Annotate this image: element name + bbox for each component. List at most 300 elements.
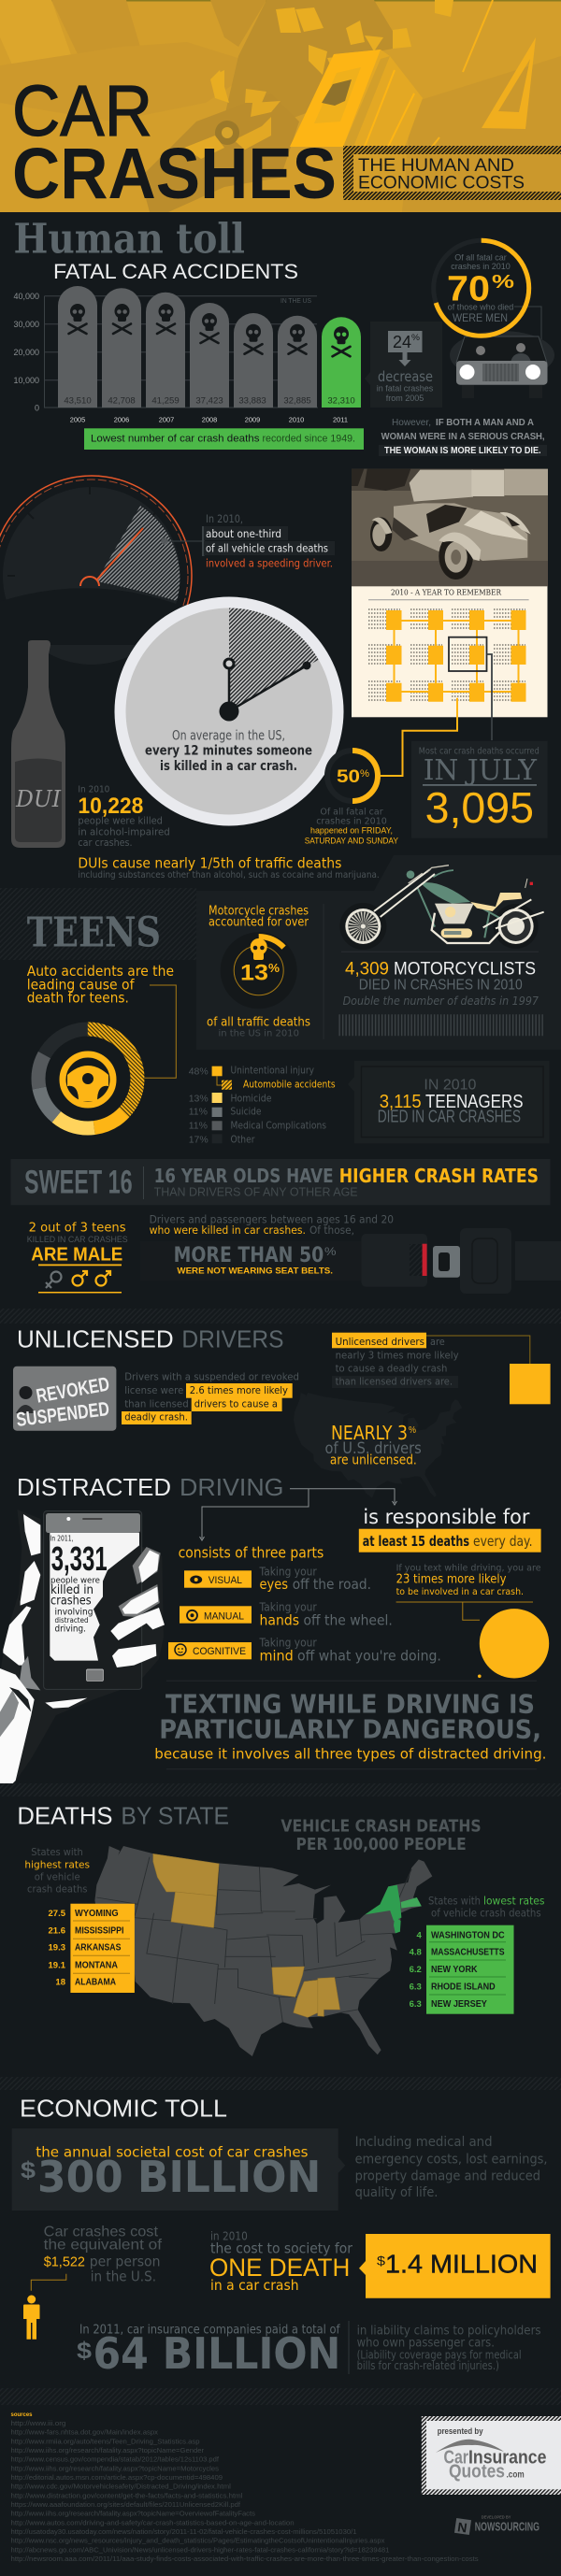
legend: causes of teen death: Other xyxy=(230,1134,255,1145)
banner: sweet 16: SWEET 16 xyxy=(24,1165,133,1201)
panel: 300 billion: $ xyxy=(21,2157,36,2183)
text: speeding driver: involved a speeding driver. xyxy=(206,557,333,570)
sources list: http://www.iii.org xyxy=(11,2419,65,2427)
legend: causes of teen death: Automobile accidents xyxy=(243,1079,336,1090)
map: USA by state xyxy=(94,1846,432,2056)
stat: 2 out of 3 are male xyxy=(27,1220,128,1294)
bar 2010: 32,885 xyxy=(283,396,311,407)
illustration: speedometer xyxy=(0,476,202,676)
panel: 300 billion xyxy=(12,2128,345,2211)
stat: 10,228 alcohol-impaired deaths: In 2010 xyxy=(78,784,109,794)
bar 2007: 2007 xyxy=(159,415,174,423)
bar 2010 xyxy=(278,316,317,423)
logo: NowSourcing: N xyxy=(456,2519,468,2536)
stat: nearly 3 percent unlicensed: are unlicensed. xyxy=(330,1453,417,1468)
text: woman more likely to die: THE WOMAN IS MORE LIKELY TO DIE. xyxy=(384,445,541,456)
text: speeding driver xyxy=(202,512,335,570)
sources list: http://www.autos.com/driving-and-safety/car-crash-statistics-based-on-age-and-location xyxy=(11,2518,295,2526)
bar 2008: 37,423 xyxy=(195,396,223,407)
text: unlicensed drivers 3 times: than licensed drivers are. xyxy=(336,1376,453,1387)
heading: fatal car accidents: FATAL CAR ACCIDENTS xyxy=(53,260,298,283)
bar chart: fatal car accidents by year: 20,000 xyxy=(13,348,39,357)
logo: NowSourcing: DEVELOPED BY xyxy=(482,2514,511,2519)
bar chart: fatal car accidents by year: IN THE US xyxy=(280,298,311,305)
table: highest rates: ALABAMA xyxy=(75,1978,116,1988)
text: DUI share of traffic deaths: including substances other than alcohol, such as cocaine and marijuana. xyxy=(78,870,380,880)
text: including medical costs xyxy=(355,2135,548,2200)
callout: texting while driving: because it involves all three types of distracted driving. xyxy=(154,1746,546,1763)
stat panel: 24 percent decrease: decrease xyxy=(378,368,433,385)
table: highest rates: 18 xyxy=(55,1978,65,1988)
panel: motorcycles xyxy=(196,855,561,1050)
stat: more than 50 percent no seat belts: WERE NOT WEARING SEAT BELTS. xyxy=(177,1267,333,1277)
legend: causes of teen death: 48% xyxy=(189,1066,209,1077)
item: cognitive distraction: COGNITIVE xyxy=(193,1646,246,1657)
warning triangle xyxy=(482,37,536,129)
icon: person xyxy=(23,2296,39,2340)
table: highest rates: ARKANSAS xyxy=(75,1943,122,1953)
heading: consists of three parts: consists of three parts xyxy=(179,1544,324,1562)
stat: 13 percent of traffic deaths xyxy=(207,904,310,1038)
text: leading cause of death: Auto accidents are the xyxy=(27,963,174,980)
heading: deaths by state: DEATHS xyxy=(17,1802,112,1830)
stat: nearly 3 percent unlicensed xyxy=(325,1422,422,1468)
stat: more than 50 percent no seat belts xyxy=(174,1244,337,1277)
text: drivers and passengers 16 to 20 xyxy=(150,1212,394,1237)
stat: 1,522 per person xyxy=(23,2225,163,2340)
text: leading cause of death: leading cause of xyxy=(27,976,135,993)
item: cognitive distraction: off what you're doing. xyxy=(297,1648,441,1665)
panel: 3,115 teenagers: DIED IN CAR CRASHES xyxy=(378,1108,521,1126)
heading: vehicle crash deaths per 100,000 xyxy=(280,1816,482,1854)
subtitle with hatched frame xyxy=(343,146,561,200)
banner: sweet 16: 16 YEAR OLDS HAVE xyxy=(154,1165,334,1187)
text: suspended license with highlights: 2.6 times more likely xyxy=(190,1385,288,1396)
stat: 15 deaths every day: at least 15 deaths xyxy=(363,1533,469,1550)
stat: 13 percent of traffic deaths: 13 xyxy=(240,960,268,985)
text: drivers and passengers 16 to 20: who were killed in car crashes. xyxy=(150,1224,306,1237)
panel: 300 billion: 300 BILLION xyxy=(37,2152,321,2202)
table: lowest rates: 4 xyxy=(417,1930,423,1940)
stat: 4,309 motorcyclists: DIED IN CRASHES IN 2010 xyxy=(359,977,523,993)
text: suspended license with highlights: Drivers with a suspended or revoked xyxy=(124,1372,299,1383)
stat: 23 times more likely xyxy=(396,1564,549,1679)
panel: most deaths in July: 3,095 xyxy=(425,783,534,832)
stat: 23 times more likely: 23 times more likely xyxy=(396,1572,507,1586)
text on phone screen: 3,331 killed: crashes xyxy=(50,1595,92,1609)
stat: 13 percent of traffic deaths: % xyxy=(268,961,280,975)
bar chart: fatal car accidents by year: 30,000 xyxy=(13,320,39,329)
illustration: clock xyxy=(114,596,344,826)
stat: 2 out of 3 are male: ARE MALE xyxy=(31,1244,122,1265)
section hatch band xyxy=(0,2077,561,2090)
24 percent box: % xyxy=(411,333,420,342)
table: lowest rates: 6.2 xyxy=(410,1965,422,1975)
stat: 50 percent on weekends xyxy=(305,751,399,846)
month day grids xyxy=(368,609,525,700)
connector: weekend to 50 percent xyxy=(379,698,457,776)
caption: lowest rates: States with xyxy=(428,1895,481,1908)
subtitle with hatched frame: THE HUMAN AND xyxy=(358,156,514,176)
connector: distracted driving branches xyxy=(200,1489,396,1540)
text: suspended license with highlights: license were xyxy=(124,1385,183,1396)
text: unlicensed drivers 3 times: nearly 3 times more likely xyxy=(336,1350,459,1361)
banner: sweet 16: THAN DRIVERS OF ANY OTHER AGE xyxy=(154,1184,358,1198)
stat: one death in a car crash: ONE DEATH xyxy=(209,2254,350,2282)
bar chart: fatal car accidents by year: 10,000 xyxy=(13,376,39,385)
text: including medical costs: emergency costs, lost earnings, xyxy=(355,2152,548,2167)
stat: 23 times more likely: If you text while driving, you are xyxy=(396,1564,541,1574)
illustration: motorcycle xyxy=(339,866,544,950)
stat: 64 billion: 64 BILLION xyxy=(94,2328,340,2379)
stat: 23 times more likely: to be involved in a car crash. xyxy=(396,1587,524,1597)
text: liability claims xyxy=(357,2325,541,2372)
heading: distracted driving xyxy=(17,1473,284,1501)
caption: highest rates xyxy=(24,1846,90,1895)
text on phone screen: 3,331 killed: 3,331 xyxy=(51,1539,108,1578)
stat: one death in a car crash: in a car crash xyxy=(210,2277,299,2294)
stat: 70 percent were men ring: % xyxy=(492,272,514,293)
illustration: DUI bottle xyxy=(11,640,65,848)
bar 2006: 2006 xyxy=(114,415,129,423)
text: drivers and passengers 16 to 20: Drivers and passengers between ages 16 and 20 xyxy=(150,1212,394,1225)
stat: 70 percent were men ring: of those who died xyxy=(448,303,513,312)
sources list: http://www.nsc.org/news_resources/injury_and_death_statistics/Pages/EstimatingtheCostsofUnintentionalInjuries.aspx xyxy=(11,2537,385,2545)
table: lowest rates: 6.3 xyxy=(410,1982,422,1992)
item: manual distraction: MANUAL xyxy=(204,1610,244,1622)
sources list: https://www.aaafoundation.org/sites/default/files/2011Unlicensed2Kill.pdf xyxy=(11,2500,241,2509)
sources list: http://abcnews.go.com/ABC_Univision/News/unlicensed-drivers-higher-rates-fatal-crashes-california/story?id=18239481 xyxy=(11,2545,389,2554)
callout: texting while driving xyxy=(154,1681,546,1769)
illustration: clock: On average in the US, xyxy=(172,729,285,744)
caption: lowest rates: of vehicle crash deaths xyxy=(431,1907,541,1920)
text: woman more likely to die: WOMAN WERE IN A SERIOUS CRASH, xyxy=(381,431,545,442)
stat: 50 percent on weekends: % xyxy=(360,768,369,780)
stat: 4,309 motorcyclists xyxy=(338,959,544,1025)
text: including medical costs: quality of life. xyxy=(355,2185,438,2200)
icon: down arrow xyxy=(398,352,411,366)
subtitle with hatched frame: ECONOMIC COSTS xyxy=(358,174,525,193)
item: cognitive distraction xyxy=(168,1637,441,1665)
text on phone screen: 3,331 killed xyxy=(50,1534,108,1635)
item: cognitive distraction: Taking your xyxy=(259,1637,317,1650)
stat: 10,228 alcohol-impaired deaths xyxy=(78,784,170,849)
bar 2006 xyxy=(102,288,141,423)
legend: causes of teen death: Suicide xyxy=(230,1107,262,1118)
bar 2005: 2005 xyxy=(70,415,85,423)
text: suspended license with highlights: than licensed xyxy=(124,1398,189,1410)
stat: 70 percent were men ring: crashes in 2010 xyxy=(451,262,511,271)
stat: 15 deaths every day: is responsible for xyxy=(363,1506,530,1528)
bar 2010: 2010 xyxy=(289,415,304,423)
heading: distracted driving: DRIVING xyxy=(180,1473,284,1501)
stat: more than 50 percent no seat belts: MORE THAN 50 xyxy=(174,1244,324,1267)
bar 2005: 43,510 xyxy=(64,396,92,407)
table: lowest rates: 6.3 xyxy=(410,1999,422,2010)
stat: 13 percent of traffic deaths: of all traffic deaths xyxy=(207,1015,310,1029)
text on phone screen: 3,331 killed: killed in xyxy=(50,1583,94,1597)
section hatch band xyxy=(0,1783,561,1796)
sources list: http://www.iihs.org/research/fatality.aspx?topicName=Gender xyxy=(11,2446,205,2454)
sources list: http://www.cdc.gov/Motorvehiclesafety/Distracted_Driving/index.html xyxy=(11,2483,231,2491)
header photo banner xyxy=(0,0,561,212)
text: unlicensed drivers 3 times: Unlicensed drivers xyxy=(336,1337,424,1348)
stat: 13 percent of traffic deaths: in the US in 2010 xyxy=(218,1028,299,1038)
legend: causes of teen death: Medical Complications xyxy=(230,1121,326,1132)
sources list: http://www.distraction.gov/content/get-the-facts/facts-and-statistics.html xyxy=(11,2491,243,2499)
stat: 1,522 per person: in the U.S. xyxy=(91,2268,156,2285)
text: DUI share of traffic deaths xyxy=(78,854,380,880)
stat: 70 percent were men ring: 70 xyxy=(447,270,490,309)
stat: 70 percent were men ring: WERE MEN xyxy=(453,311,508,324)
bar chart: fatal car accidents by year: 0 xyxy=(35,404,39,413)
illustration: revoked license card xyxy=(13,1367,116,1431)
text on phone screen: 3,331 killed: people were xyxy=(50,1576,100,1585)
text: woman more likely to die: However, xyxy=(392,417,431,428)
item: visual distraction: off the road. xyxy=(293,1576,371,1593)
stat: one death in a car crash: in 2010 xyxy=(210,2229,248,2243)
item: visual distraction: VISUAL xyxy=(209,1575,242,1586)
text on phone screen: 3,331 killed: distracted xyxy=(54,1616,88,1624)
text: suspended license with highlights: drivers to cause a xyxy=(194,1398,278,1410)
text: unlicensed drivers 3 times: to cause a deadly crash xyxy=(336,1363,447,1374)
callout: lowest number of deaths xyxy=(84,428,364,450)
bar chart: fatal car accidents by year xyxy=(13,286,361,423)
stat: 10,228 alcohol-impaired deaths: people were killed xyxy=(78,815,163,827)
stat: 10,228 alcohol-impaired deaths: car crashes. xyxy=(78,837,133,849)
bar 2008 xyxy=(190,303,229,423)
stat: 50 percent on weekends: Of all fatal car xyxy=(320,808,383,818)
bar 2006: 42,708 xyxy=(108,396,136,407)
bar 2009: 33,883 xyxy=(238,396,266,407)
illustration: car with two passengers xyxy=(450,307,554,398)
table: highest rates: 21.6 xyxy=(49,1925,65,1936)
table: highest rates: WYOMING xyxy=(75,1909,119,1919)
stat: 4,309 motorcyclists: Double the number of deaths in 1997 xyxy=(343,994,539,1008)
donut chart: causes of teen death xyxy=(38,1029,137,1128)
heading: distracted driving: DISTRACTED xyxy=(17,1473,171,1501)
24 percent box: 24 xyxy=(393,333,411,351)
text: leading cause of death: death for teens. xyxy=(27,989,129,1006)
stat: 4,309 motorcyclists: 4,309 xyxy=(345,959,389,979)
weekend highlight connectors xyxy=(395,621,518,692)
stat: 50 percent on weekends: 50 xyxy=(337,767,360,787)
text: suspended license with highlights: deadly crash. xyxy=(124,1411,188,1423)
table: highest rates: 19.1 xyxy=(49,1960,66,1970)
connector: text to donut xyxy=(145,985,176,1078)
sources list: http://newsroom.aaa.com/2011/11/aaa-study-finds-costs-associated-with-traffic-crashes-are-more-than-three-times-greater-than-congestion-costs xyxy=(11,2555,479,2563)
text on phone screen: 3,331 killed: In 2011, xyxy=(50,1534,74,1542)
banner: sweet 16 xyxy=(11,1159,550,1205)
item: manual distraction xyxy=(180,1600,393,1628)
heading: unlicensed drivers: UNLICENSED xyxy=(17,1325,174,1353)
24 percent box xyxy=(388,331,423,352)
illustration: clock: is killed in a car crash. xyxy=(160,759,297,774)
callout: 1.4 million xyxy=(359,2234,551,2298)
text: liability claims: bills for crash-related injuries.) xyxy=(357,2359,499,2372)
bar 2008: 2008 xyxy=(202,415,217,423)
stat: 50 percent on weekends: SATURDAY AND SUNDAY xyxy=(305,836,399,846)
table: highest rates: 27.5 xyxy=(49,1909,66,1919)
sources list: http://www.iihs.org/research/fatality.aspx?topicName=OverviewofFatalityFacts xyxy=(11,2510,255,2518)
stat: 64 billion: $ xyxy=(77,2338,92,2364)
stat: 15 deaths every day: every day. xyxy=(473,1533,533,1550)
caption: highest rates: States with xyxy=(31,1846,83,1858)
logo box: presented by CarInsuranceQuotes.com: Quotes xyxy=(449,2462,505,2483)
heading: vehicle crash deaths per 100,000: PER 100,000 PEOPLE xyxy=(295,1835,467,1854)
stat panel: 24 percent decrease: from 2005 xyxy=(386,394,424,403)
text: unlicensed drivers 3 times xyxy=(332,1333,551,1404)
item: manual distraction: Taking your xyxy=(259,1600,317,1613)
stat: more than 50 percent no seat belts: % xyxy=(324,1245,337,1258)
stat: 1,522 per person: Car crashes cost xyxy=(44,2225,159,2240)
item: manual distraction: off the wheel. xyxy=(303,1611,393,1628)
table: highest rates: MISSISSIPPI xyxy=(75,1925,124,1936)
legend: causes of teen death: Homicide xyxy=(230,1093,271,1104)
stat: 4,309 motorcyclists: MOTORCYCLISTS xyxy=(394,959,536,979)
logo box: presented by CarInsuranceQuotes.com: Car xyxy=(443,2448,468,2469)
icon: thought face xyxy=(175,1644,186,1655)
panel: 3,115 teenagers: IN 2010 xyxy=(424,1078,477,1094)
table: lowest rates xyxy=(410,1925,514,2014)
photo: vintage car xyxy=(352,469,548,586)
heading: vehicle crash deaths per 100,000: VEHICLE CRASH DEATHS xyxy=(280,1816,482,1836)
text on phone screen: 3,331 killed: involving xyxy=(54,1607,94,1617)
text: liability claims: (Liability coverage pays for medical xyxy=(357,2348,522,2361)
table: lowest rates: NEW YORK xyxy=(431,1965,478,1975)
legend: causes of teen death: 11% xyxy=(189,1107,208,1118)
callout: 1.4 million: $ xyxy=(377,2253,385,2268)
text: drivers and passengers 16 to 20: Of those, xyxy=(309,1224,354,1237)
connector: July to panel xyxy=(486,654,492,740)
item: visual distraction xyxy=(184,1566,371,1593)
stat: 50 percent on weekends: crashes in 2010 xyxy=(316,817,387,827)
callout: texting while driving: TEXTING WHILE DRIVING IS xyxy=(165,1689,535,1720)
panel: 300 billion: the annual societal cost of car crashes xyxy=(36,2143,309,2160)
item: visual distraction: eyes xyxy=(260,1576,288,1593)
illustration: DUI bottle: DUI xyxy=(15,786,62,812)
caption: highest rates: highest rates xyxy=(24,1858,90,1870)
bar 2009: 2009 xyxy=(245,415,260,423)
sources list: http://www.census.gov/compendia/statab/2012/tables/12s1103.pdf xyxy=(11,2455,220,2464)
icon: steering wheel xyxy=(63,1054,113,1105)
text on phone screen: 3,331 killed: driving. xyxy=(54,1624,86,1635)
table: lowest rates: MASSACHUSETTS xyxy=(431,1948,505,1958)
icon: gender symbols xyxy=(46,1271,110,1288)
title: car crashes: CAR xyxy=(12,71,152,151)
bar chart: fatal car accidents by year: 40,000 xyxy=(13,292,39,301)
heading: deaths by state: BY STATE xyxy=(121,1802,229,1830)
illustration: seat belt xyxy=(140,1228,561,1294)
bar 2011 highlighted xyxy=(322,317,361,423)
heading: unlicensed drivers: DRIVERS xyxy=(181,1325,284,1353)
caption: lowest rates: lowest rates xyxy=(483,1895,545,1908)
stat: 13 percent of traffic deaths: Motorcycle crashes xyxy=(209,904,309,918)
legend: causes of teen death: 11% xyxy=(189,1121,208,1132)
panel: 3,115 teenagers: 3,115 xyxy=(380,1092,422,1112)
table: lowest rates: 4.8 xyxy=(410,1948,422,1958)
text: speeding driver: of all vehicle crash deaths xyxy=(206,542,328,555)
heading: teens: TEENS xyxy=(27,909,161,957)
text: liability claims: who own passenger cars. xyxy=(357,2337,495,2351)
July highlight box xyxy=(449,637,486,671)
stat: one death in a car crash xyxy=(209,2229,353,2294)
text: DUI share of traffic deaths: DUIs cause nearly 1/5th of traffic deaths xyxy=(78,854,342,871)
illustration: revoked license card: SUSPENDED xyxy=(15,1398,110,1431)
bar 2011 highlighted: 2011 xyxy=(333,415,348,423)
stat: 1,522 per person: per person xyxy=(90,2253,161,2269)
highlighted states: highest rates xyxy=(153,1853,340,2017)
bar 2007: 41,259 xyxy=(151,396,180,407)
panel: most deaths in July xyxy=(411,741,548,838)
stat: 10,228 alcohol-impaired deaths: 10,228 xyxy=(78,794,143,819)
table: highest rates: 19.3 xyxy=(49,1943,65,1953)
logo box: presented by CarInsuranceQuotes.com: presented by xyxy=(438,2426,483,2436)
map: faint US backdrop xyxy=(294,1393,462,1498)
icon: wheel xyxy=(187,1610,197,1621)
title: car crashes xyxy=(12,71,337,214)
section hatch band xyxy=(0,2388,561,2405)
logo box: presented by CarInsuranceQuotes.com: Insurance xyxy=(468,2448,546,2469)
stat: 1,522 per person: the equivalent of xyxy=(44,2238,163,2254)
legend: causes of teen death: 17% xyxy=(189,1134,209,1145)
stat: 64 billion: In 2011, car insurance companies paid a total of xyxy=(79,2324,340,2338)
table: lowest rates: WASHINGTON DC xyxy=(431,1930,505,1940)
calendar: 2010 a year to remember: 2010 - A YEAR TO REMEMBER xyxy=(391,589,502,598)
ambulance xyxy=(290,50,423,147)
caption: lowest rates xyxy=(428,1895,545,1920)
sources list: http://www-fars.nhtsa.dot.gov/Main/index.aspx xyxy=(11,2428,158,2437)
callout: lowest number of deaths: recorded since 1949. xyxy=(262,434,355,445)
heading: human toll: Human toll xyxy=(13,216,245,264)
stat: 50 percent on weekends: happened on FRIDAY, xyxy=(310,826,393,837)
stat: 13 percent of traffic deaths: accounted for over xyxy=(209,916,309,930)
legend: causes of teen death: 13% xyxy=(189,1093,209,1104)
panel: most deaths in July: IN JULY xyxy=(424,754,538,787)
text: liability claims: in liability claims to policyholders xyxy=(357,2325,541,2339)
item: cognitive distraction: mind xyxy=(260,1648,294,1665)
sources list: http://editorial.autos.msn.com/article.aspx?cp-documentid=498409 xyxy=(11,2473,223,2482)
sources list: http://www.iihs.org/research/fatality.aspx?topicName=Motorcycles xyxy=(11,2464,219,2472)
stat: 70 percent were men ring xyxy=(434,240,529,336)
heading: economic toll: ECONOMIC TOLL xyxy=(20,2094,227,2122)
illustration: clock: every 12 minutes someone xyxy=(145,744,312,759)
bar 2007 xyxy=(146,293,185,423)
text: speeding driver: about one-third xyxy=(206,527,281,540)
stat: 10,228 alcohol-impaired deaths: in alcohol-impaired xyxy=(78,825,170,837)
text: unlicensed drivers 3 times: are xyxy=(430,1337,445,1348)
text: leading cause of death xyxy=(27,963,174,1006)
illustration: revoked license card: REVOKED xyxy=(35,1373,111,1408)
table: highest rates: MONTANA xyxy=(75,1960,118,1970)
calendar: 2010 a year to remember xyxy=(352,586,548,717)
teens hatch band xyxy=(0,888,196,960)
text: suspended license with highlights xyxy=(122,1372,299,1424)
text: woman more likely to die: IF BOTH A MAN AND A xyxy=(436,417,534,428)
illustration: hand holding phone xyxy=(0,1510,165,1790)
sources list: http://www.rmiia.org/auto/teens/Teen_Driving_Statistics.asp xyxy=(11,2437,200,2445)
caption: highest rates: crash deaths xyxy=(27,1882,88,1895)
panel: 3,115 teenagers: TEENAGERS xyxy=(425,1092,524,1112)
sources list: http://usatoday30.usatoday.com/news/nation/story/2011-11-02/fatal-vehicle-crashes-cost-millions/51051030/1 xyxy=(11,2527,357,2536)
title: car crashes: CRASHES xyxy=(12,134,337,214)
bar 2011 highlighted: 32,310 xyxy=(327,396,355,407)
heading: deaths by state xyxy=(17,1802,229,1830)
bar 2005 xyxy=(58,286,97,423)
stat: nearly 3 percent unlicensed: NEARLY 3 xyxy=(331,1422,408,1444)
table: lowest rates: RHODE ISLAND xyxy=(431,1982,496,1992)
weekend highlight blocks xyxy=(386,610,525,702)
